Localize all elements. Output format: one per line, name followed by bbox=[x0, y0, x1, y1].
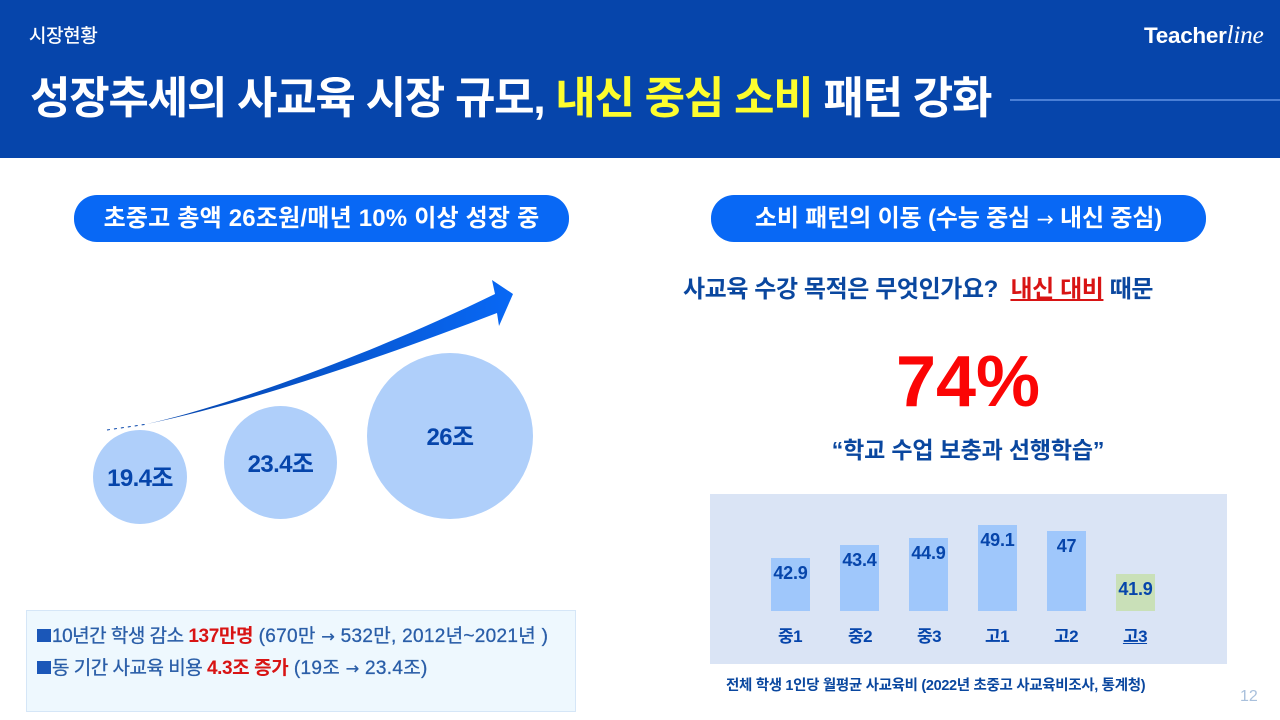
bubble: 19.4조: 19.4조 bbox=[107, 465, 173, 492]
bar: 고3: 41.9 bbox=[1118, 579, 1153, 599]
title: 성장추세의 사교육 시장 규모, 내신 중심 소비 패턴 강화 bbox=[30, 74, 991, 123]
label: 중2: 중2 bbox=[848, 627, 872, 646]
bar: 중3 bbox=[909, 538, 948, 611]
label: 고3: 고3 bbox=[1123, 627, 1147, 646]
section label: 시장현황 bbox=[29, 26, 97, 47]
bubble: 26조: 26조 bbox=[426, 424, 473, 451]
bar: 고1 bbox=[978, 525, 1017, 611]
left heading pill: 초중고 총액 26조원/매년 10% 이상 성장 중 bbox=[104, 205, 539, 232]
bar chart panel bbox=[710, 494, 1227, 664]
bubble: 26조 bbox=[367, 353, 533, 519]
note line 1: 10년간 학생 감소 137만명 (670만 → 532만, 2012년~2021년 ) bbox=[52, 626, 548, 647]
right heading pill: 소비 패턴의 이동 (수능 중심 → 내신 중심) bbox=[755, 205, 1162, 232]
logo: Teacherline bbox=[1144, 20, 1264, 49]
bar: 중2: 43.4 bbox=[842, 550, 877, 570]
bar: 고3 bbox=[1116, 574, 1155, 611]
bar: 중1 bbox=[771, 558, 810, 611]
page number: 12 bbox=[1240, 688, 1258, 705]
left heading pill bbox=[74, 195, 569, 242]
note box bbox=[26, 610, 576, 712]
bar: 고1: 49.1 bbox=[980, 530, 1015, 550]
bar: 고2: 47 bbox=[1057, 536, 1076, 556]
74% stat: 74% bbox=[896, 342, 1040, 422]
survey question: 사교육 수강 목적은 무엇인가요? 내신 대비 때문 bbox=[683, 276, 1153, 303]
right heading pill bbox=[711, 195, 1206, 242]
growth arrow bbox=[106, 280, 513, 430]
label: 고1: 고1 bbox=[985, 627, 1009, 646]
header band bbox=[0, 0, 1280, 158]
bubble: 23.4조: 23.4조 bbox=[248, 451, 313, 478]
label: 중1: 중1 bbox=[778, 627, 802, 646]
label: 고2: 고2 bbox=[1054, 627, 1078, 646]
bubble: 19.4조 bbox=[93, 430, 187, 524]
header rule bbox=[1010, 99, 1280, 101]
bar: 중2 bbox=[840, 545, 879, 611]
note line 2: 동 기간 사교육 비용 4.3조 증가 (19조 → 23.4조) bbox=[52, 658, 428, 679]
bar: 고2 bbox=[1047, 531, 1086, 611]
bar: 중3: 44.9 bbox=[911, 543, 946, 563]
label: 중3: 중3 bbox=[917, 627, 941, 646]
quote: “학교 수업 보충과 선행학습” bbox=[832, 437, 1104, 463]
bubble: 23.4조 bbox=[224, 406, 337, 519]
bar: 중1: 42.9 bbox=[773, 563, 808, 583]
chart source caption: 전체 학생 1인당 월평균 사교육비 (2022년 초중고 사교육비조사, 통계청) bbox=[726, 678, 1145, 694]
